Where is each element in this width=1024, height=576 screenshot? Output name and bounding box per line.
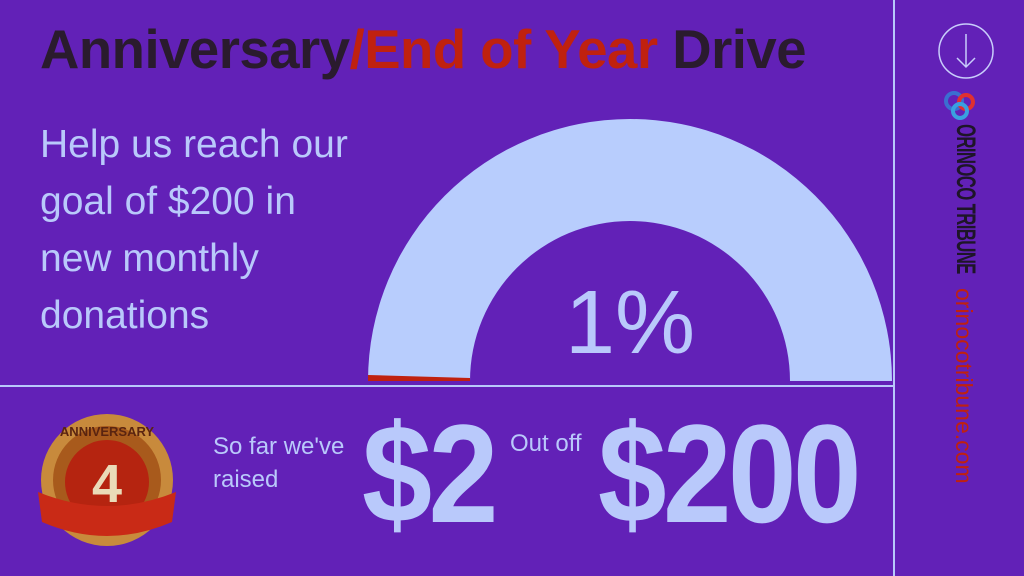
website vertical: orinocotribune.com <box>951 288 977 484</box>
icon: anniversary medal <box>38 414 176 546</box>
goal amount: $200 <box>598 395 858 552</box>
brand name vertical: ORINOCO TRIBUNE <box>951 124 981 274</box>
icon: logo <box>944 91 975 120</box>
icon: anniversary medal: ANNIVERSARY <box>60 424 154 439</box>
raised label: So far we've <box>213 433 344 460</box>
goal label: Out off <box>510 430 582 457</box>
goal text: Help us reach our goal of $200 in new monthly donations <box>40 123 348 337</box>
raised label <box>213 433 344 493</box>
percent label: 1% <box>565 273 695 373</box>
title: Anniversary/End of Year Drive <box>40 19 806 80</box>
icon: anniversary medal: 4 <box>92 454 122 514</box>
icon: down arrow <box>938 23 994 79</box>
raised amount: $2 <box>362 395 495 552</box>
raised label: raised <box>213 466 278 493</box>
